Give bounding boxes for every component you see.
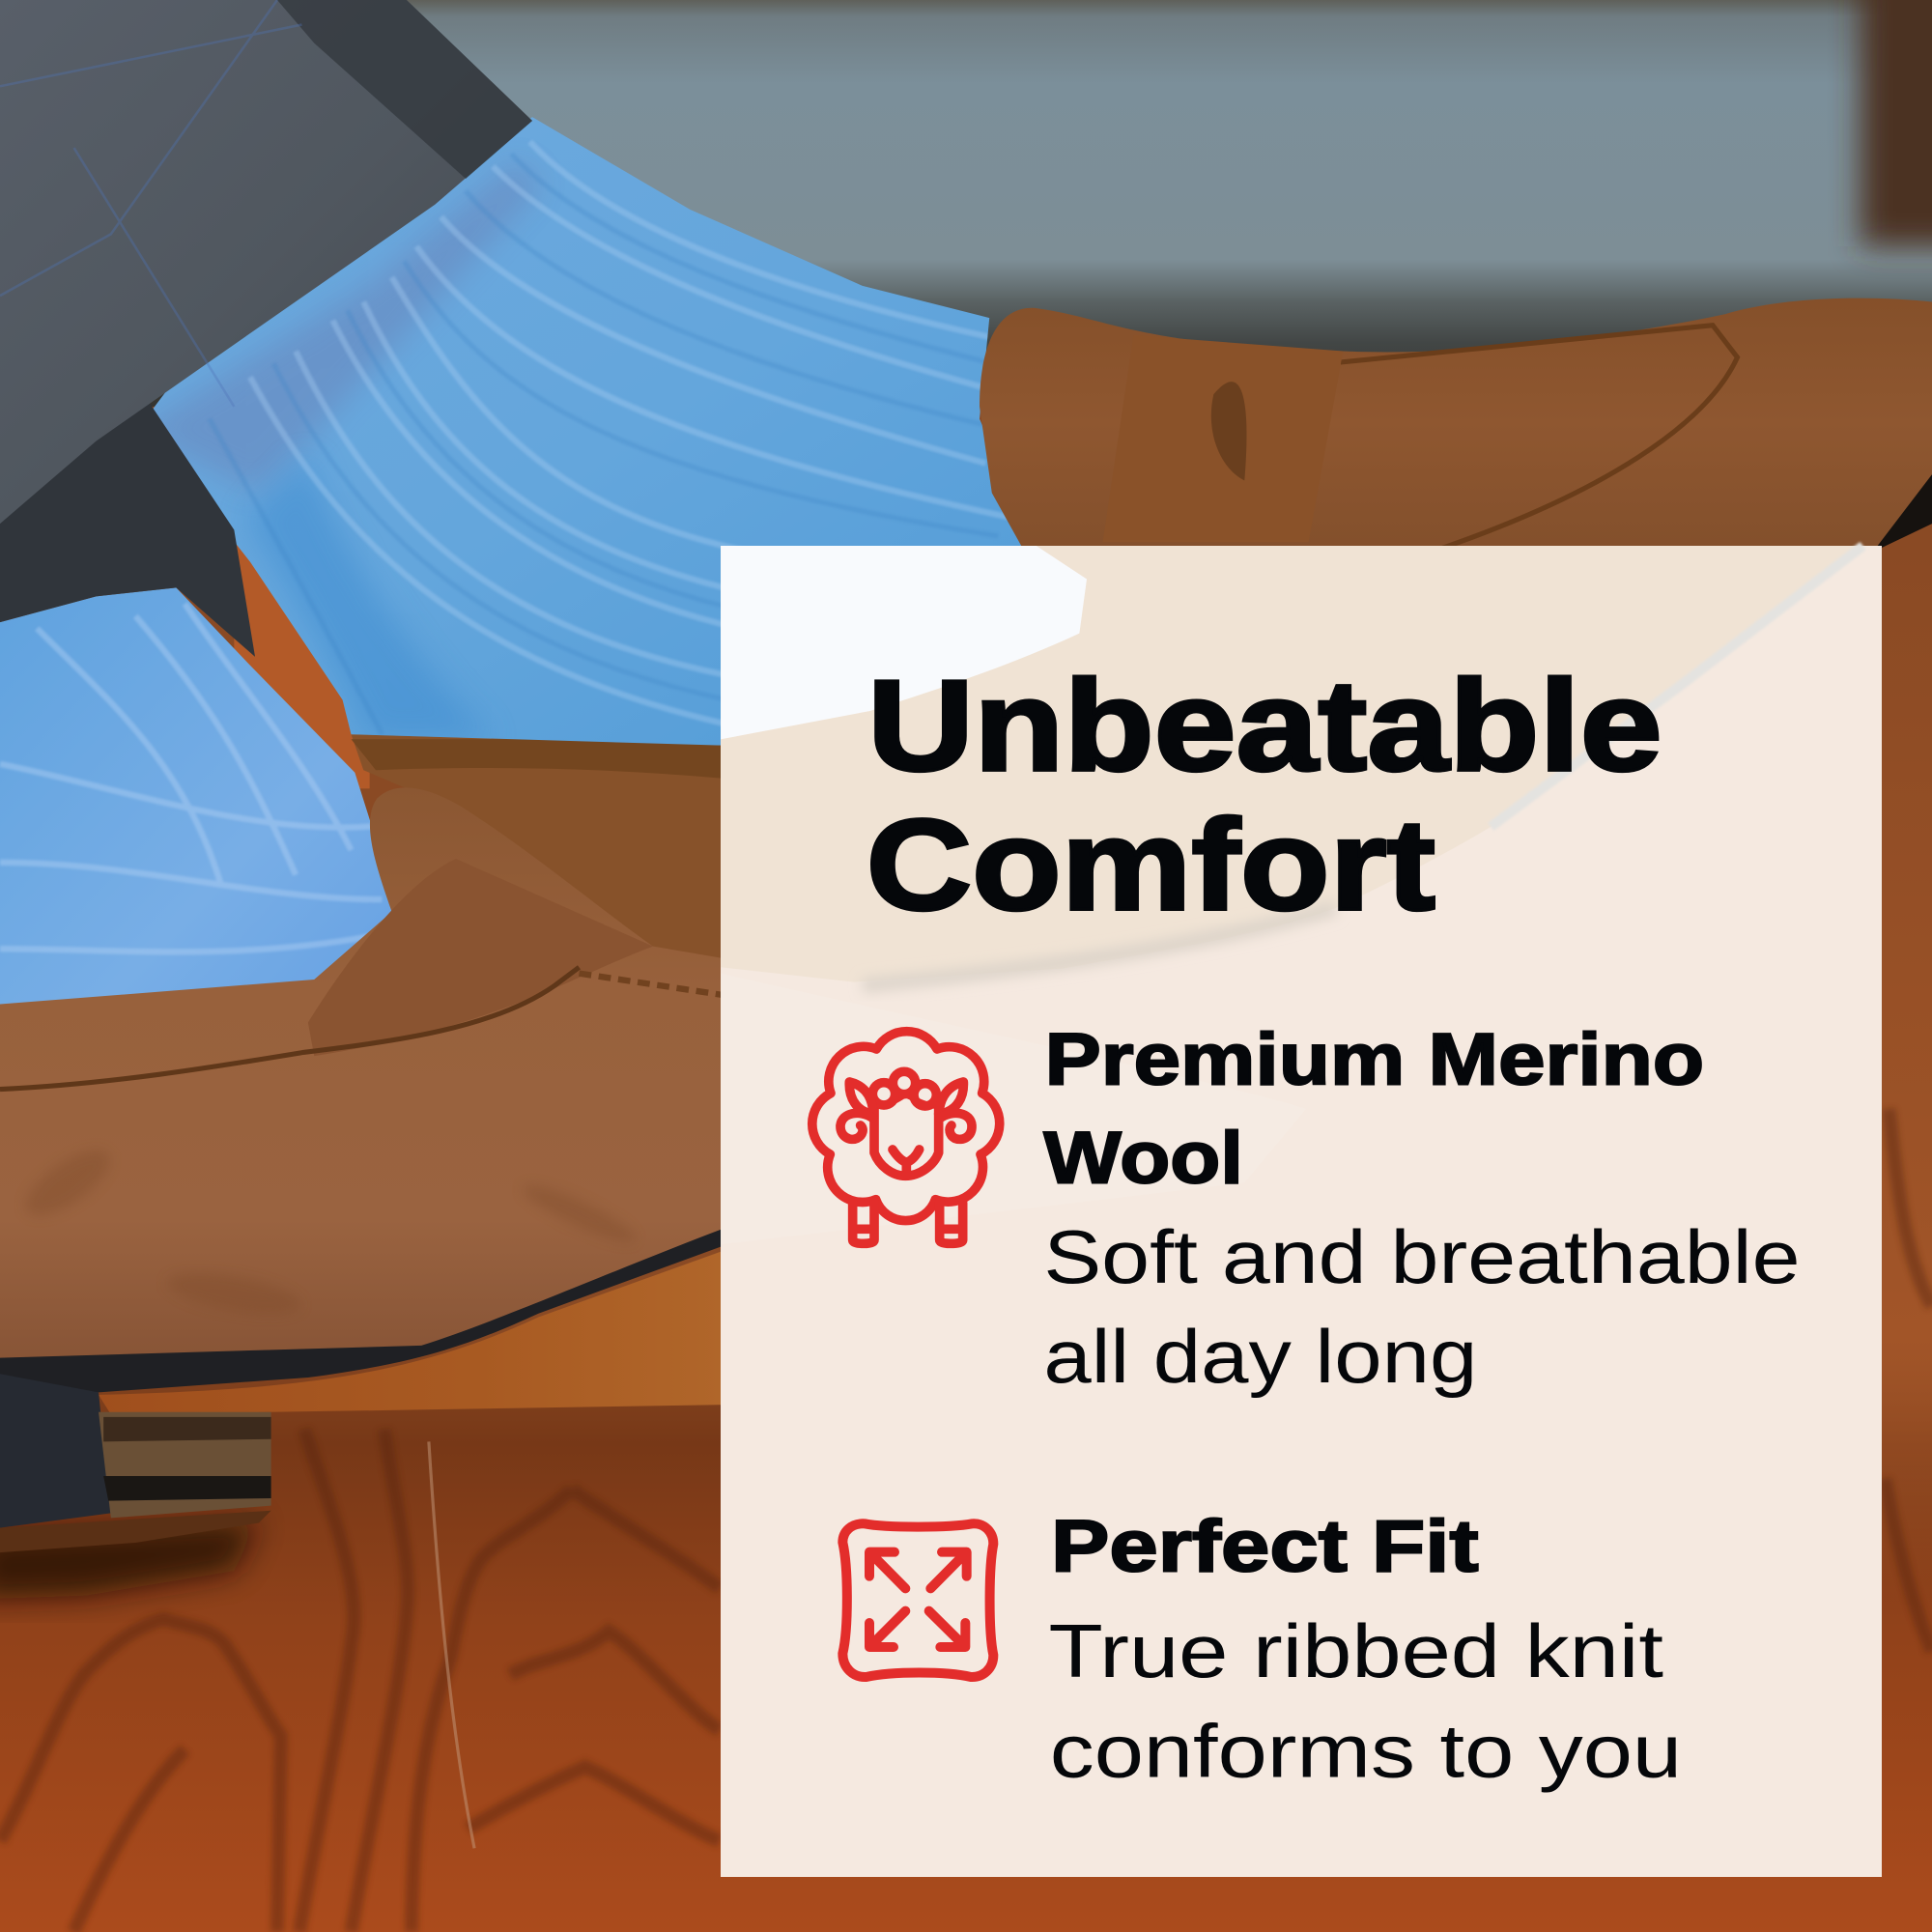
upper loafer vamp xyxy=(980,298,1932,552)
soft shadow under ghost loafer xyxy=(863,908,1336,985)
feature: merino wool text xyxy=(1043,1018,1801,1399)
feature: perfect fit text: conforms to you xyxy=(1050,1710,1682,1793)
title: Comfort xyxy=(867,793,1435,937)
blurred room backdrop xyxy=(0,0,1932,419)
feature: perfect fit text xyxy=(1048,1505,1682,1793)
pale sole line xyxy=(1491,546,1863,827)
trouser check lines xyxy=(0,0,301,407)
blurred furniture at right edge xyxy=(1861,0,1932,246)
wood floor xyxy=(0,407,1932,1932)
upper sock xyxy=(153,117,1022,746)
ghost lower loafer xyxy=(721,974,1306,1244)
panel text xyxy=(867,654,1801,1793)
washed-out sock xyxy=(721,546,1087,739)
leather sole xyxy=(99,1249,727,1414)
icon: stretch fit arrows xyxy=(842,1523,993,1677)
text panel xyxy=(721,546,1882,1877)
feature: merino wool text: Wool xyxy=(1043,1117,1243,1199)
lower sock xyxy=(0,587,392,1005)
feature: merino wool text: Premium Merino xyxy=(1045,1018,1704,1100)
suede blotches xyxy=(16,1139,640,1322)
trousers upper leg xyxy=(0,0,532,524)
heel block xyxy=(0,1374,271,1552)
title xyxy=(867,654,1662,937)
feature: merino wool text: all day long xyxy=(1043,1316,1477,1399)
feature: perfect fit text: Perfect Fit xyxy=(1051,1505,1479,1587)
loafer ghost under panel xyxy=(721,546,1863,982)
trousers lower leg xyxy=(0,401,255,657)
title: Unbeatable xyxy=(867,654,1662,798)
icon: sheep xyxy=(812,1032,1000,1243)
upper loafer side under sock xyxy=(352,734,727,974)
feature: merino wool text: Soft and breathable xyxy=(1043,1216,1801,1299)
trouser cuff shading xyxy=(277,0,532,179)
dark welt xyxy=(0,1227,727,1392)
feature: perfect fit text: True ribbed knit xyxy=(1048,1610,1663,1693)
lower loafer xyxy=(0,787,1306,1363)
